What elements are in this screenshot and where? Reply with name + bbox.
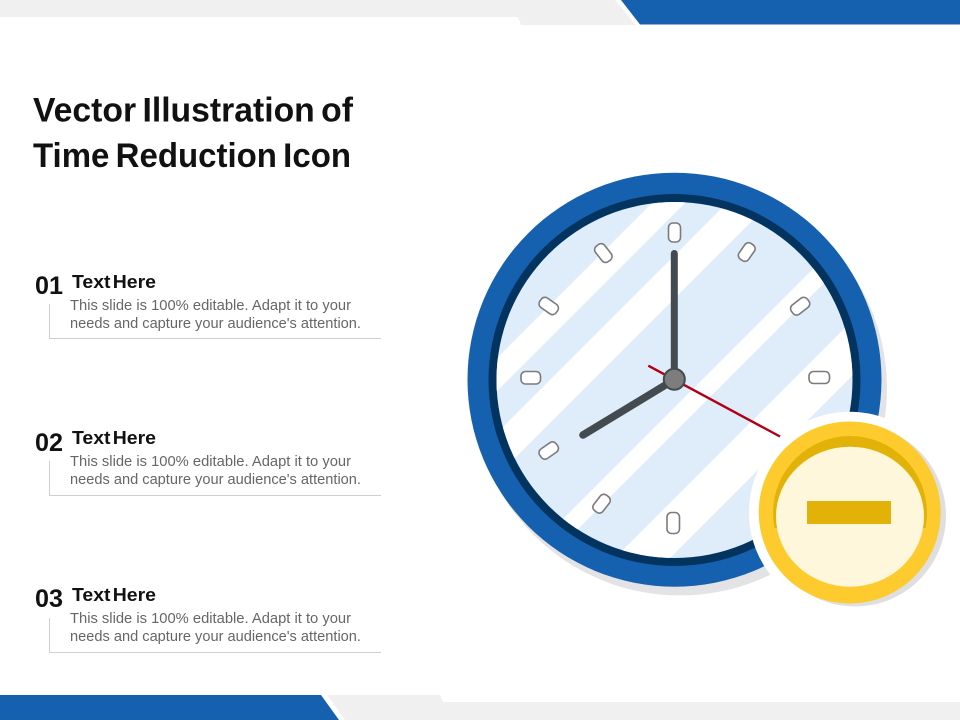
badge ring: [759, 422, 941, 604]
center pivot: [664, 369, 685, 390]
top banner: [0, 0, 960, 25]
heading 01: Text Here: [72, 271, 156, 292]
minute hand: [671, 254, 678, 379]
item 02: [35, 427, 381, 496]
number 02: 02: [35, 429, 63, 457]
badge shadow: [764, 424, 946, 606]
bottom banner: [0, 695, 960, 720]
body 02: needs and capture your audience's attention.: [70, 472, 361, 488]
hour hand: [583, 381, 672, 435]
heading 03: Text Here: [72, 584, 156, 605]
body 02: This slide is 100% editable. Adapt it to your: [70, 454, 351, 470]
icon: minus badge: [749, 412, 950, 613]
title: [33, 92, 354, 175]
minus sign: [807, 501, 891, 524]
hour ticks: [521, 223, 830, 534]
bracket 03: [50, 618, 381, 652]
clock rim: [468, 173, 882, 587]
badge inner shade: [773, 436, 927, 528]
heading 02: Text Here: [72, 427, 156, 448]
badge center: [776, 447, 924, 587]
number 03: 03: [35, 585, 63, 613]
body 03: This slide is 100% editable. Adapt it to your: [70, 611, 351, 627]
clock shadow: [473, 182, 887, 596]
title: Time Reduction Icon: [33, 137, 351, 175]
clock inner rim: [488, 194, 860, 566]
icon: clock: [468, 172, 887, 596]
item 03: [35, 584, 381, 652]
badge halo: [749, 412, 950, 613]
number 01: 01: [35, 272, 63, 300]
item 01: [35, 271, 381, 338]
body 01: needs and capture your audience's attention.: [70, 316, 361, 332]
body 03: needs and capture your audience's attention.: [70, 629, 361, 645]
title: Vector Illustration of: [33, 92, 354, 130]
bracket 02: [50, 461, 381, 496]
clock face: [496, 202, 852, 558]
bracket 01: [50, 304, 381, 338]
body 01: This slide is 100% editable. Adapt it to your: [70, 298, 351, 314]
second hand: [648, 366, 780, 436]
